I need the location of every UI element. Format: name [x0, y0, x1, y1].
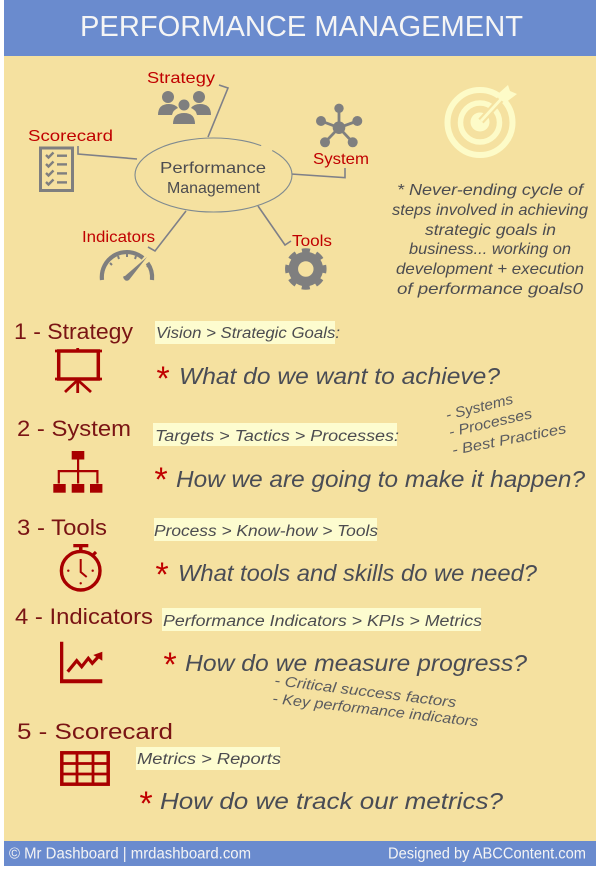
- icon: gauge: [102, 252, 152, 281]
- notes: - Systems: [444, 392, 515, 424]
- footer credit left: © Mr Dashboard | mrdashboard.com: [9, 846, 251, 862]
- footer bar: [4, 841, 596, 866]
- icon: line chart: [60, 642, 102, 683]
- question: [154, 556, 537, 594]
- title: PERFORMANCE MANAGEMENT: [80, 11, 523, 43]
- heading: 3 - Tools: [17, 515, 107, 540]
- highlight: [136, 747, 281, 770]
- icon: target: [448, 85, 517, 155]
- connector lines: [78, 85, 345, 251]
- highlight: Targets > Tactics > Processes:: [155, 428, 399, 445]
- definition text: strategic goals in: [425, 222, 556, 239]
- icon: people: [158, 91, 211, 124]
- highlight: [154, 518, 378, 541]
- central ellipse: Performance: [160, 160, 266, 177]
- section 2: system: [17, 392, 585, 499]
- icon: gear: [287, 250, 324, 288]
- label: system: System: [313, 151, 369, 168]
- highlight: Vision > Strategic Goals:: [156, 325, 340, 342]
- icon: scorecard checklist: [40, 148, 72, 190]
- icon: presentation board: [55, 348, 102, 393]
- heading: 4 - Indicators: [15, 604, 153, 629]
- question: *: [153, 461, 168, 499]
- section 4: indicators: [15, 604, 527, 730]
- heading: 2 - System: [17, 416, 131, 441]
- icon: network: [316, 104, 362, 147]
- highlight: Performance Indicators > KPIs > Metrics: [163, 613, 482, 630]
- notes: - Processes: [447, 406, 534, 441]
- question: What tools and skills do we need?: [178, 560, 537, 586]
- definition text: steps involved in achieving: [392, 202, 588, 219]
- highlight: [155, 321, 340, 344]
- highlight: Metrics > Reports: [137, 751, 281, 768]
- question: What do we want to achieve?: [179, 363, 500, 389]
- label: scorecard: Scorecard: [28, 128, 113, 145]
- question: *: [154, 556, 169, 594]
- footer credit right: Designed by ABCContent.com: [388, 846, 586, 862]
- definition text: business... working on: [409, 241, 571, 258]
- icon: org chart: [53, 451, 102, 493]
- notes: - Critical success factors: [274, 673, 457, 711]
- highlight: Process > Know-how > Tools: [154, 523, 378, 540]
- question: [153, 461, 585, 499]
- central ellipse: [135, 138, 292, 212]
- definition text: [392, 182, 588, 298]
- question: [138, 785, 503, 823]
- definition text: development + execution: [396, 261, 584, 278]
- label: tools: Tools: [292, 233, 332, 250]
- question: [155, 360, 500, 398]
- heading: 5 - Scorecard: [17, 719, 173, 744]
- notes: - Best Practices: [451, 421, 568, 459]
- label: indicators: Indicators: [82, 229, 155, 246]
- header banner: [4, 0, 596, 56]
- notes: [272, 673, 479, 730]
- definition text: * Never-ending cycle of: [397, 182, 585, 199]
- highlight: [162, 608, 482, 631]
- question: *: [155, 360, 170, 398]
- notes: - Key performance indicators: [272, 691, 479, 730]
- icon: stopwatch: [61, 544, 100, 590]
- question: How do we track our metrics?: [160, 788, 503, 814]
- question: [162, 646, 527, 684]
- label: strategy: Strategy: [147, 70, 215, 87]
- highlight: [153, 423, 399, 446]
- section 3: tools: [17, 515, 537, 594]
- definition text: of performance goals0: [397, 281, 583, 298]
- concept diagram: [28, 70, 369, 288]
- central ellipse: Management: [167, 180, 261, 197]
- section 5: scorecard: [17, 719, 503, 823]
- question: *: [138, 785, 153, 823]
- question: *: [162, 646, 177, 684]
- heading: 1 - Strategy: [14, 319, 133, 344]
- section 1: strategy: [14, 319, 500, 398]
- notes: [444, 392, 568, 459]
- question: How do we measure progress?: [185, 650, 527, 676]
- question: How we are going to make it happen?: [176, 466, 585, 492]
- icon: table: [61, 752, 109, 785]
